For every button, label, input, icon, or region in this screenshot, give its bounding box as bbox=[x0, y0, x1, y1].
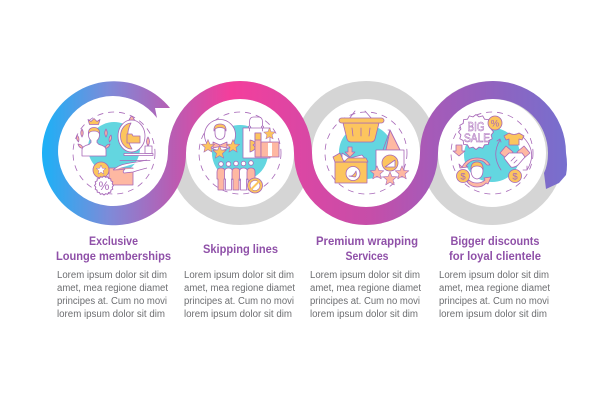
body text: amet, mea regione diamet bbox=[57, 283, 168, 294]
title: Premium wrapping bbox=[316, 236, 418, 248]
title bbox=[449, 236, 541, 263]
icon: person with rating stars bbox=[201, 120, 240, 158]
body text bbox=[57, 270, 168, 320]
icon: exchange arrows bbox=[496, 137, 532, 170]
icon: percent coin: % bbox=[491, 118, 500, 130]
body text: amet, mea regione diamet bbox=[184, 283, 295, 294]
column: skipping lines bbox=[184, 244, 295, 320]
column: bigger discounts bbox=[439, 236, 550, 320]
icon: dollar coins: $ bbox=[460, 172, 466, 182]
column: premium wrapping services bbox=[310, 236, 421, 320]
icon: percent badge: % bbox=[99, 179, 110, 193]
body text: amet, mea regione diamet bbox=[439, 283, 550, 294]
icon: premium wrapping services bbox=[325, 111, 409, 194]
icon: tote bag with stars bbox=[370, 130, 409, 185]
column: exclusive lounge memberships bbox=[56, 236, 171, 320]
body text: Lorem ipsum dolor sit dim bbox=[310, 270, 420, 281]
body text bbox=[184, 270, 295, 320]
title: Bigger discounts bbox=[450, 236, 540, 248]
icon: crowned person with laurels bbox=[76, 118, 112, 156]
icon: t-shirt bbox=[504, 133, 524, 145]
icon: big sale burst bbox=[458, 114, 494, 150]
icon: dollar coins bbox=[456, 170, 522, 182]
body text: lorem ipsum dolor sit dim bbox=[439, 309, 547, 320]
icon: no entry sign bbox=[248, 178, 262, 193]
body text bbox=[439, 270, 550, 320]
icon: big sale burst: BIG bbox=[468, 119, 484, 134]
icon: parcel box bbox=[333, 153, 368, 183]
body text: principes at. Cum no movi bbox=[439, 296, 549, 307]
icon: star badge bbox=[93, 162, 109, 178]
body text: Lorem ipsum dolor sit dim bbox=[184, 270, 294, 281]
icon: arrow into box bbox=[345, 147, 355, 157]
title bbox=[56, 236, 171, 263]
icon: shopping basket bbox=[339, 111, 384, 142]
icon: hand holding offer bbox=[109, 160, 147, 185]
title: Services bbox=[346, 251, 388, 263]
body text: lorem ipsum dolor sit dim bbox=[57, 309, 165, 320]
title: Lounge memberships bbox=[56, 251, 171, 263]
body text: principes at. Cum no movi bbox=[184, 296, 294, 307]
icon: skipping lines bbox=[199, 112, 281, 194]
icon: big sale burst: SALE bbox=[464, 131, 490, 145]
title: Exclusive bbox=[89, 236, 138, 248]
icon: shopping bag and gift bbox=[243, 117, 279, 158]
body text: Lorem ipsum dolor sit dim bbox=[57, 270, 167, 281]
gray background rings bbox=[177, 90, 555, 216]
body text: lorem ipsum dolor sit dim bbox=[310, 309, 418, 320]
body text: principes at. Cum no movi bbox=[310, 296, 420, 307]
title bbox=[316, 236, 418, 263]
title: for loyal clientele bbox=[449, 251, 541, 263]
icon: queue of people bbox=[217, 161, 255, 190]
body text: lorem ipsum dolor sit dim bbox=[184, 309, 292, 320]
body text: Lorem ipsum dolor sit dim bbox=[439, 270, 549, 281]
gradient ribbon arrow bbox=[42, 81, 567, 225]
body text bbox=[310, 270, 421, 320]
body text: amet, mea regione diamet bbox=[310, 283, 421, 294]
icon: mirror and shelf bbox=[118, 116, 153, 160]
title: Skipping lines bbox=[203, 244, 278, 256]
icon: customer head with arrows bbox=[453, 145, 491, 187]
icon: handshake bbox=[500, 146, 530, 167]
icon: exclusive lounge memberships bbox=[73, 112, 155, 195]
body text: principes at. Cum no movi bbox=[57, 296, 167, 307]
icon: dollar coins: $ bbox=[512, 172, 518, 182]
icon: bigger discounts bbox=[451, 112, 533, 194]
